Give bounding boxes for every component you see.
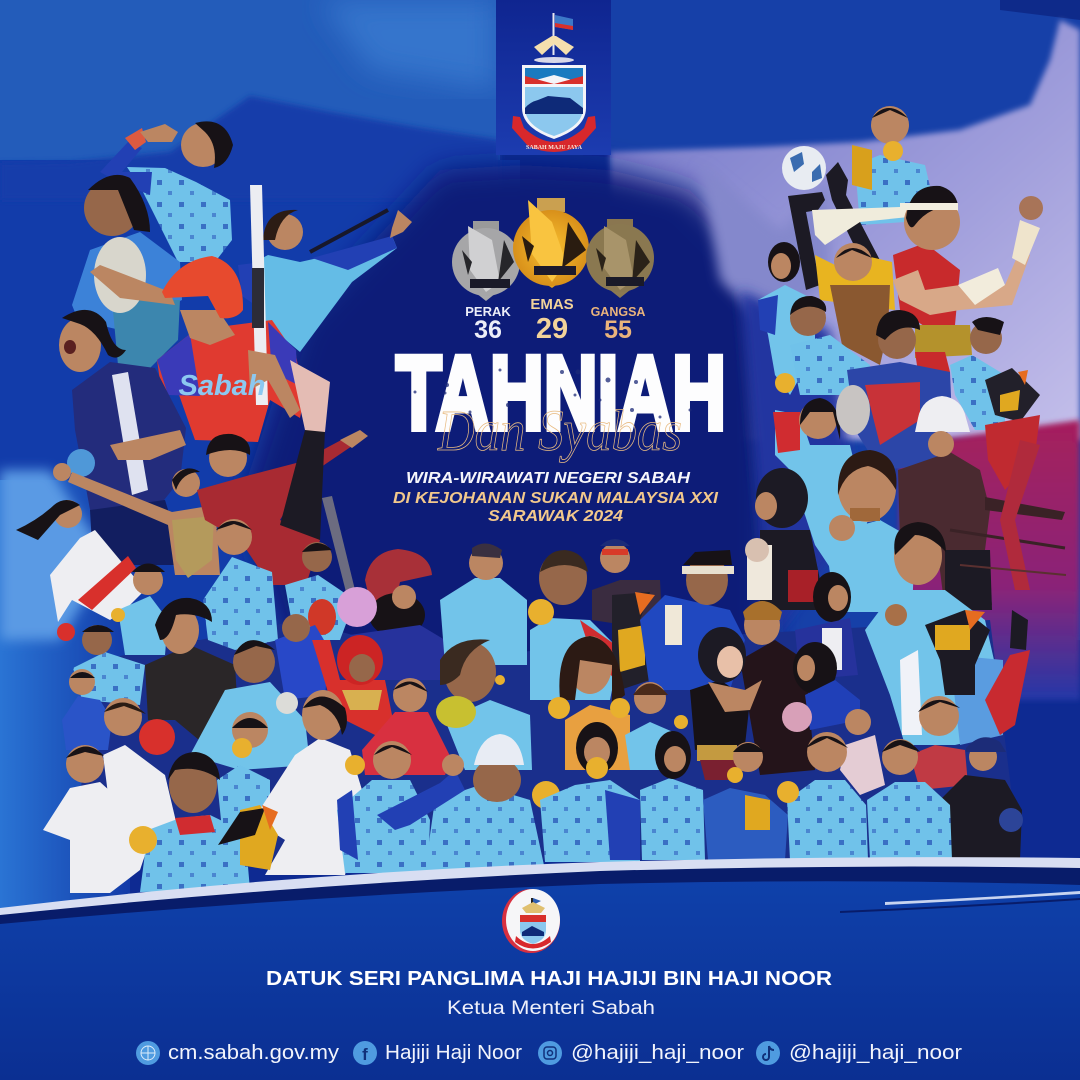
- back fill: [70, 620, 1020, 860]
- white wave line: [0, 857, 1080, 915]
- athlete: boy in white cap: [377, 734, 560, 870]
- icon: Sabah coat of arms: SABAH MAJU JAYA: [526, 145, 583, 151]
- medal tally: 29: [536, 313, 568, 345]
- athlete: boy with brown hair: [625, 682, 688, 770]
- icon: Hala Tuju emblem: [502, 889, 560, 953]
- athlete: karate girl in white: [16, 500, 145, 641]
- athlete: hijab girl in blue: [782, 642, 860, 732]
- athlete: archer in white hat: [898, 396, 1066, 610]
- icon: Sabah coat of arms: [512, 13, 596, 152]
- heading: event lines: SARAWAK 2024: [488, 508, 623, 525]
- athlete: girl with braids and rugby ball: [72, 175, 182, 368]
- heading: event lines: [393, 470, 719, 525]
- icon: facebook: [353, 1041, 377, 1065]
- medal: gold: [513, 198, 589, 288]
- icon: mascot plush: [612, 592, 655, 690]
- athlete: girl biting medal: [825, 450, 915, 612]
- medal: silver: [452, 221, 520, 301]
- athlete: boy in blue vest: [62, 669, 112, 750]
- athlete: screaming girl in striped jersey: [53, 310, 186, 565]
- athlete: boy with headband: [640, 538, 772, 690]
- athlete: young girl with plush: [703, 742, 788, 860]
- athlete: male dancer: [740, 601, 815, 775]
- athlete: long-haired girl: [548, 636, 630, 770]
- icon: mascot plush: [218, 805, 278, 870]
- title: TAHNIAH: TAHNIAH: [396, 335, 726, 452]
- navy wave band: [0, 862, 1080, 924]
- athlete: boy with dark hair: [950, 317, 1005, 430]
- athlete: muay thai fighter: [812, 186, 1043, 372]
- athlete: man biting medal: [100, 121, 233, 262]
- athlete: hijab girl with number 14: [795, 572, 858, 680]
- athlete: man holding gold medal: [528, 550, 620, 700]
- text: website: cm.sabah.gov.my: [168, 1042, 339, 1064]
- medal tally: 36: [474, 316, 502, 344]
- athlete: man with scarf at back: [440, 543, 527, 665]
- athlete: baseball batter: Sabah: [178, 370, 266, 402]
- swoosh: [885, 891, 1080, 905]
- athlete: top girl biting medal: [852, 106, 932, 225]
- icon: red boxing glove: [308, 599, 336, 635]
- navy crest strip: [496, 0, 611, 155]
- script subtitle: Dan Syabas: Dan Syabas: [437, 398, 682, 463]
- athlete: girl with stick: [238, 210, 412, 352]
- athlete: baseball batter: [90, 185, 304, 442]
- athlete: boy with afro: [847, 310, 952, 470]
- icon: website globe: [136, 1041, 160, 1065]
- text: title: Ketua Menteri Sabah: [447, 998, 655, 1019]
- text: tiktok handle: @hajiji_haji_noor: [789, 1042, 962, 1064]
- athlete: girl with braid and medal: [436, 639, 532, 770]
- athlete: man with scarf and silver medal: [190, 640, 310, 770]
- athlete: girl kissing medal: [217, 712, 270, 830]
- athlete: coach in sunglasses: [592, 539, 662, 625]
- athlete: young man with glasses: [865, 522, 1030, 745]
- athlete: tall boy with scarf: [203, 519, 278, 650]
- athlete: karate girl centre: [253, 690, 365, 875]
- athlete: boy with medal: [111, 564, 168, 655]
- athlete: gymnast: [68, 468, 220, 578]
- athlete: boy with silver medal: [867, 739, 952, 860]
- athlete: smiling girl: [777, 732, 868, 860]
- medal: bronze: [586, 219, 654, 298]
- text: facebook name: Hajiji Haji Noor: [385, 1042, 522, 1064]
- athlete: boy with white grin: [285, 542, 355, 640]
- icon: tiktok: [756, 1041, 780, 1065]
- footer panel: [0, 857, 1080, 1080]
- medal tally: 55: [604, 316, 632, 344]
- athlete: boy in red kicking: [197, 360, 368, 585]
- medal tally: GANGSA: [591, 305, 645, 319]
- athlete: fencer in white: [43, 745, 150, 893]
- athlete: boxer in red: [312, 635, 395, 735]
- medal tally: PERAK: [465, 304, 511, 319]
- icon: facebook: f: [362, 1045, 368, 1064]
- dark swoosh: [840, 898, 1080, 913]
- icon: mascot plush and red cloth: [985, 368, 1040, 490]
- athlete: hijab girl with medal: [540, 722, 640, 862]
- athletes: top-right group: [755, 106, 1066, 612]
- heading: chief minister name: DATUK SERI PANGLIMA HAJI HAJIJI BIN HAJI NOOR: [266, 968, 833, 990]
- athlete: man in cap with bowling ball: [940, 737, 1023, 860]
- athlete: girl in red jacket: [362, 678, 452, 775]
- athlete: karate girl with red glove: [103, 698, 178, 832]
- athlete: boy in wetsuit: [145, 598, 238, 745]
- athletes: main crowd: [43, 519, 1030, 893]
- icon: grey bat: [322, 496, 355, 592]
- contact row: [136, 1041, 962, 1065]
- athlete: scarf girl: [758, 242, 815, 395]
- athlete: baseball hijab: [350, 549, 445, 680]
- athlete: hijab dancer: [690, 627, 762, 780]
- heading: event lines: WIRA-WIRAWATI NEGERI SABAH: [406, 470, 691, 487]
- athlete: goalkeeper: [788, 162, 895, 365]
- athletes: top-left group: [16, 121, 412, 641]
- athlete: boy biting thumb: [73, 625, 145, 705]
- medal tally: [465, 296, 645, 345]
- athlete: boy with chain: [775, 296, 870, 395]
- athlete: woman in pink gi: [840, 709, 885, 795]
- heading: event lines: DI KEJOHANAN SUKAN MALAYSIA XXI: [393, 490, 719, 507]
- athlete: boy with red collar and gold medal: [129, 752, 250, 892]
- athlete: hijab girl second: [640, 731, 705, 860]
- athlete: rugby girl: [773, 385, 870, 590]
- icon: volleyball: [782, 146, 826, 190]
- athlete: girl in jersey with medal: [337, 741, 430, 873]
- athlete: girl in royal blue: [275, 614, 330, 700]
- athlete: hijab girl black: [755, 468, 826, 610]
- icon: instagram: [538, 1041, 562, 1065]
- text: instagram handle: @hajiji_haji_noor: [571, 1042, 744, 1064]
- icon: pink ball: [337, 587, 377, 627]
- medal tally: EMAS: [530, 296, 574, 313]
- athlete: smiling boy in red vest: [910, 696, 968, 790]
